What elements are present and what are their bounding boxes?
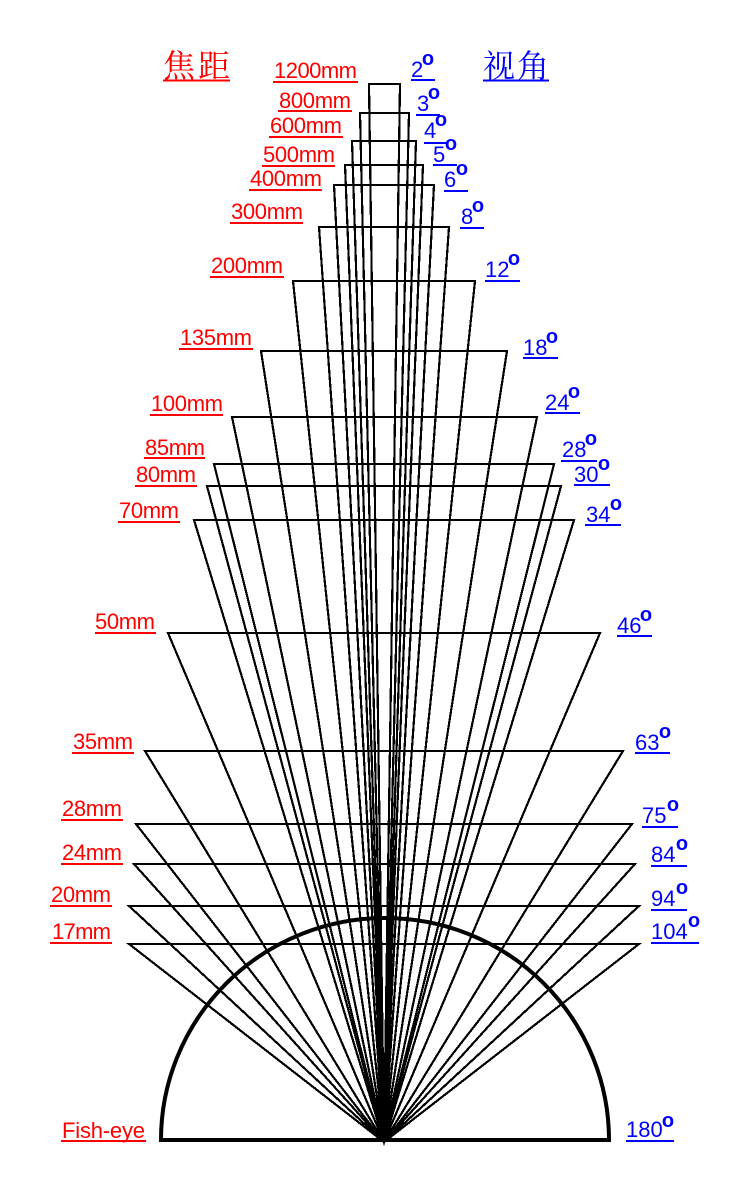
label: 30 degrees: 30 [574,462,598,487]
label: 28 degrees: 28 [562,437,586,462]
label: 200mm: 200mm [211,253,283,278]
label: 63 degrees: 63 [635,730,659,755]
label: 12 degrees [485,248,520,282]
heading: focal length: 焦距 [163,48,230,84]
label: 84 degrees: o [676,833,688,855]
label: 180 degrees [626,1110,674,1142]
label: 1200mm: 1200mm [274,58,357,83]
label: 63 degrees [635,721,671,755]
label: 34 degrees [585,493,622,527]
label: 75 degrees: 75 [642,803,666,828]
label: 24 degrees: 24 [545,390,569,415]
label: 46 degrees: 46 [617,613,641,638]
label: 28 degrees [561,428,597,462]
label: 5 degrees [433,133,457,167]
label: 34 degrees: o [610,493,622,515]
label: 4 degrees: 4 [424,118,436,143]
label: 46 degrees: o [640,604,652,626]
label: 2 degrees: o [422,48,434,70]
label: 2 degrees [411,48,435,82]
label: 17mm: 17mm [52,919,111,944]
label: 80mm: 80mm [136,462,196,487]
label: 12 degrees: 12 [485,257,509,282]
label: 94 degrees: 94 [651,886,675,911]
chart: field-of-view trapezoids from common apex [129,84,639,1142]
label: 104 degrees [651,910,700,944]
label: Fish-eye: Fish-eye [62,1118,145,1143]
label: 75 degrees [642,794,679,828]
label: 500mm: 500mm [263,142,335,167]
label: 28 degrees: o [585,428,597,450]
label: 8 degrees [460,195,484,229]
label: 46 degrees [617,604,652,638]
label: 6 degrees: 6 [444,167,456,192]
label: 18 degrees: o [546,326,558,348]
label: 800mm: 800mm [279,88,351,113]
chart: 180 degree fish-eye semicircle [161,918,609,1140]
label: 94 degrees: o [676,877,688,899]
label: 84 degrees [651,833,688,867]
label: 24mm: 24mm [62,840,122,865]
focal length labels column [50,48,358,1143]
label: 18 degrees: 18 [523,335,547,360]
label: 50mm: 50mm [95,609,155,634]
label: 135mm: 135mm [180,325,252,350]
label: 180 degrees: o [662,1110,674,1132]
label: 5 degrees: 5 [433,142,445,167]
label: 3 degrees: 3 [417,91,429,116]
heading: angle of view: 视角 [483,48,549,84]
label: 6 degrees: o [456,158,468,180]
label: 180 degrees: 180 [626,1117,663,1142]
label: 70mm: 70mm [119,498,179,523]
label: 300mm: 300mm [231,199,303,224]
label: 8 degrees: o [472,195,484,217]
label: 30 degrees [574,453,610,487]
label: 63 degrees: o [659,721,671,743]
label: 12 degrees: o [508,248,520,270]
label: 400mm: 400mm [250,166,322,191]
label: 28mm: 28mm [62,796,122,821]
label: 30 degrees: o [598,453,610,475]
label: 18 degrees [523,326,558,360]
label: 24 degrees [545,381,580,415]
label: 94 degrees [651,877,688,911]
label: 4 degrees [424,109,447,143]
label: 6 degrees [444,158,468,192]
label: 104 degrees: 104 [651,919,688,944]
label: 5 degrees: o [445,133,457,155]
label: 84 degrees: 84 [651,842,675,867]
label: 104 degrees: o [688,910,700,932]
label: 3 degrees [416,82,440,116]
label: 75 degrees: o [667,794,679,816]
label: 8 degrees: 8 [461,204,473,229]
label: 35mm: 35mm [73,729,133,754]
label: 600mm: 600mm [270,113,342,138]
label: 24 degrees: o [568,381,580,403]
label: 100mm: 100mm [151,391,223,416]
label: 2 degrees: 2 [411,57,423,82]
label: 4 degrees: o [435,109,447,131]
label: 3 degrees: o [428,82,440,104]
angle of view labels column [411,48,700,1142]
label: 34 degrees: 34 [586,502,610,527]
label: 85mm: 85mm [145,435,205,460]
label: 20mm: 20mm [51,882,111,907]
